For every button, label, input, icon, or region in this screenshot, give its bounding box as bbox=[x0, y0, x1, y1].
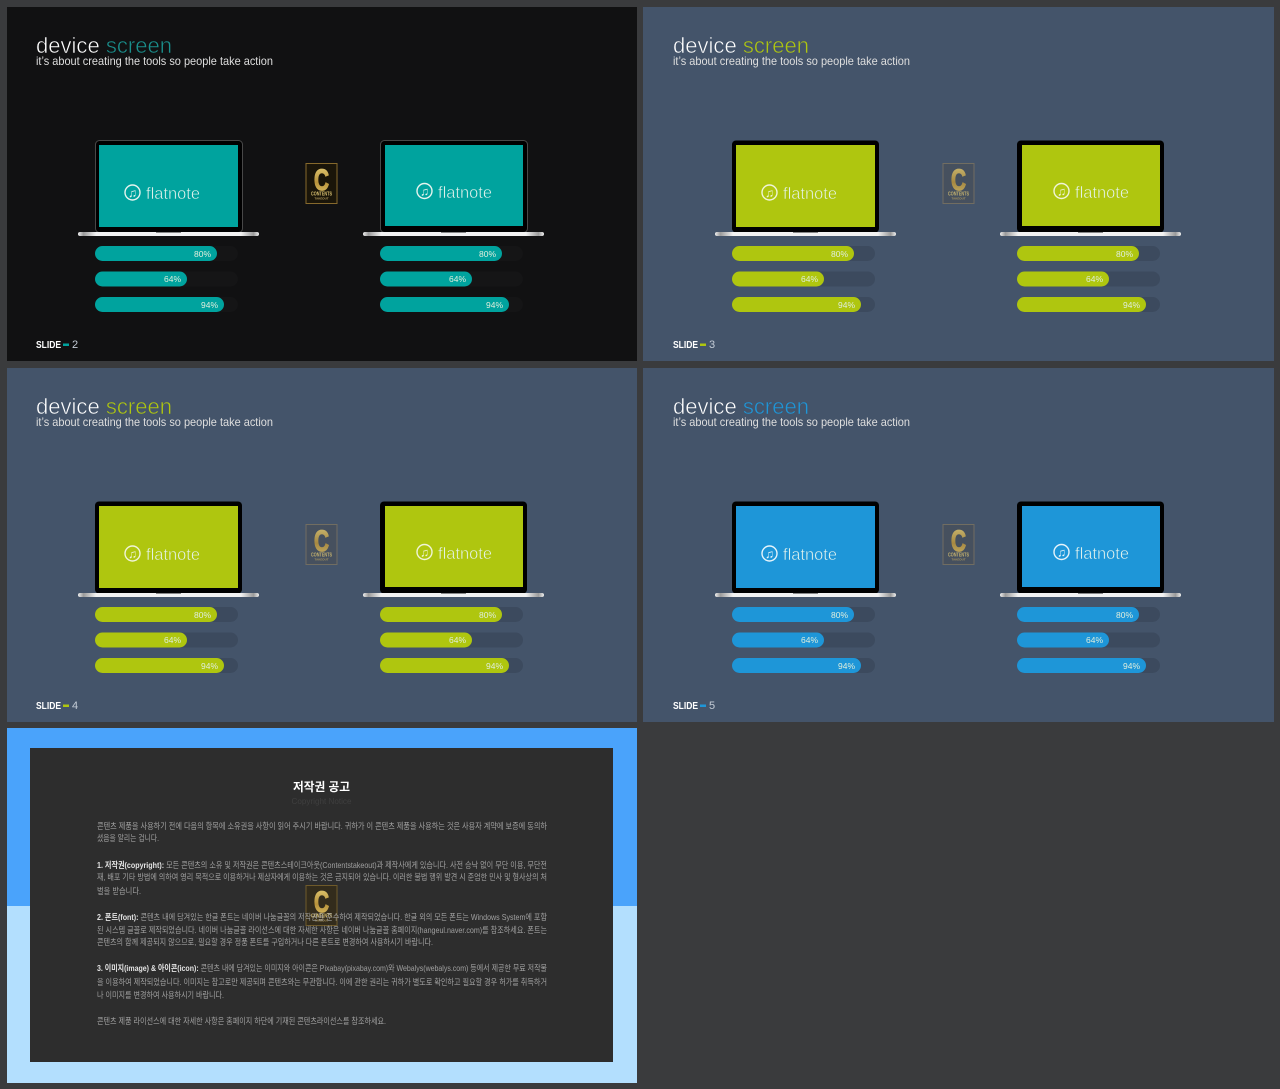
laptop left bbox=[78, 140, 259, 236]
bars left: 80% bbox=[194, 610, 211, 620]
notice footer: 콘텐츠 제품 라이선스에 대한 자세한 사항은 홈페이지 하단에 기재된 콘텐츠라이선스를 참조하세요. bbox=[97, 1016, 386, 1026]
bars left: 64% bbox=[801, 635, 818, 645]
panel: slide 2 (black, teal) bbox=[7, 7, 637, 361]
logo badge: CONTENTS bbox=[311, 914, 333, 920]
logo badge: C bbox=[951, 164, 966, 197]
notice section 2: 콘텐츠의 함께 제공되지 않으므로, 필요할 경우 정품 폰트를 구입하거나 다른 폰트로 변경하여 사용하시기 바랍니다. bbox=[97, 937, 433, 947]
laptop right bbox=[363, 502, 544, 597]
panel: slide 3 (slate, lime) bbox=[643, 7, 1274, 361]
bars left: 94% bbox=[838, 300, 855, 310]
laptop left: flatnote bbox=[146, 545, 200, 564]
logo badge: C bbox=[314, 525, 329, 558]
notice heading: 저작권 공고 bbox=[293, 779, 350, 794]
bars left: 80% bbox=[831, 249, 848, 259]
bars right: 64% bbox=[1086, 635, 1103, 645]
logo badge: CONTENTS bbox=[948, 192, 970, 198]
bars right: 94% bbox=[1123, 661, 1140, 671]
panel: slide 4 (slate, lime) bbox=[7, 368, 637, 722]
laptop right: flatnote bbox=[1075, 544, 1129, 563]
logo badge bbox=[306, 164, 337, 204]
laptop left: ♫ bbox=[128, 186, 137, 200]
laptop right: flatnote bbox=[438, 183, 492, 202]
slide number bbox=[673, 339, 715, 351]
slide number bbox=[36, 339, 78, 351]
laptop right: ♫ bbox=[420, 184, 429, 198]
slide number: SLIDE bbox=[36, 701, 61, 712]
bars right: 80% bbox=[479, 610, 496, 620]
notice section 3: 을 이용하여 제작되었습니다. 이미지는 참고로만 제공되며 콘텐츠와는 무관합니다. 이에 관한 권리는 귀하가 별도로 확인하고 필요할 경우 허가를 취득하거 bbox=[97, 977, 547, 987]
logo badge: C bbox=[314, 886, 329, 919]
title: device screen bbox=[36, 33, 172, 58]
logo badge bbox=[306, 524, 337, 564]
slide number: SLIDE bbox=[673, 340, 698, 351]
title: device screen bbox=[673, 394, 809, 419]
laptop right: ♫ bbox=[1057, 184, 1066, 198]
bars right: 64% bbox=[449, 635, 466, 645]
subtitle: it’s about creating the tools so people take action bbox=[36, 415, 273, 429]
notice intro: 셨음을 알리는 겁니다. bbox=[97, 833, 159, 843]
notice intro: 콘텐츠 제품을 사용하기 전에 다음의 항목에 소유권을 사항이 읽어 주시기 바랍니다. 귀하가 이 콘텐츠 제품을 사용하는 것은 사용자 계약에 보증에 동의하 bbox=[97, 821, 547, 831]
laptop left: flatnote bbox=[783, 545, 837, 564]
notice section 3 bbox=[97, 963, 547, 1000]
bars left bbox=[95, 246, 238, 312]
bars left: 80% bbox=[194, 249, 211, 259]
subtitle: it’s about creating the tools so people take action bbox=[673, 415, 910, 429]
subtitle: it’s about creating the tools so people take action bbox=[36, 54, 273, 68]
bars right: 94% bbox=[486, 300, 503, 310]
bars left: 64% bbox=[164, 635, 181, 645]
logo badge: TAKEOUT bbox=[952, 558, 966, 562]
laptop left: ♫ bbox=[765, 547, 774, 561]
logo badge: CONTENTS bbox=[311, 552, 333, 558]
panel: slide 5 (slate, blue) bbox=[643, 368, 1274, 722]
bars right: 80% bbox=[1116, 249, 1133, 259]
bars right bbox=[1017, 607, 1160, 673]
laptop right: flatnote bbox=[1075, 183, 1129, 202]
notice subheading: Copyright Notice bbox=[292, 797, 352, 806]
bars left: 94% bbox=[838, 661, 855, 671]
laptop left bbox=[715, 140, 896, 236]
logo badge: TAKEOUT bbox=[314, 918, 329, 922]
slide number bbox=[36, 700, 78, 712]
logo badge bbox=[306, 886, 337, 926]
notice section 3: 3. 이미지(image) & 아이콘(icon): 콘텐츠 내에 담겨있는 이미지와 아이콘은 Pixabay(pixabay.com)와 Webalys(webalys.com) 등에서 제공한 무료 저작물 bbox=[97, 963, 547, 973]
bars right: 64% bbox=[449, 274, 466, 284]
logo badge: C bbox=[951, 525, 966, 558]
notice section 3: 나 이미지를 변경하여 사용하시기 바랍니다. bbox=[97, 990, 224, 1000]
slide number: 2 bbox=[72, 339, 78, 351]
bars left bbox=[732, 246, 875, 312]
notice section 1: 1. 저작권(copyright): 모든 콘텐츠의 소유 및 저작권은 콘텐츠스테이크아웃(Contentstakeout)과 제작사에게 있습니다. 사전 승낙 없이 무단 이용, 무단전 bbox=[97, 860, 547, 870]
laptop right bbox=[363, 140, 544, 236]
notice section 1 bbox=[97, 860, 547, 896]
bars right: 80% bbox=[479, 249, 496, 259]
notice section 2: 된 시스템 글꼴로 제작되었습니다. 네이버 나눔글꼴 라이선스에 대한 자세한 사항은 네이버 나눔글꼴 홈페이지(hangeul.naver.com)를 참조하세요. 폰트는 bbox=[97, 925, 547, 935]
laptop right bbox=[1000, 502, 1181, 597]
panel: copyright notice bbox=[7, 728, 637, 1083]
laptop left bbox=[715, 502, 896, 597]
slide number: 5 bbox=[709, 700, 715, 712]
logo badge: TAKEOUT bbox=[314, 196, 329, 200]
slide number: SLIDE bbox=[36, 340, 61, 351]
bars right bbox=[380, 246, 523, 312]
notice section 1: 벌을 받습니다. bbox=[97, 886, 141, 896]
bars left: 64% bbox=[801, 274, 818, 284]
laptop left: ♫ bbox=[128, 547, 137, 561]
laptop left bbox=[78, 502, 259, 597]
slide number bbox=[673, 700, 715, 712]
notice section 2: 2. 폰트(font): 콘텐츠 내에 담겨있는 한글 폰트는 네이버 나눔글꼴의 저작권을 준수하여 제작되었습니다. 한글 외의 모든 폰트는 Windows System에 포함 bbox=[97, 912, 547, 922]
bars right: 94% bbox=[486, 661, 503, 671]
logo badge: TAKEOUT bbox=[952, 196, 966, 200]
bars left: 64% bbox=[164, 274, 181, 284]
logo badge bbox=[943, 524, 974, 564]
logo badge: CONTENTS bbox=[948, 552, 970, 558]
logo badge bbox=[943, 164, 974, 204]
notice section 2 bbox=[97, 912, 547, 947]
bars left: 80% bbox=[831, 610, 848, 620]
subtitle: it’s about creating the tools so people take action bbox=[673, 54, 910, 68]
laptop left: flatnote bbox=[783, 184, 837, 203]
notice intro bbox=[97, 821, 547, 843]
bars left bbox=[95, 607, 238, 673]
bars right bbox=[380, 607, 523, 673]
laptop left: flatnote bbox=[146, 184, 200, 203]
slide number: 3 bbox=[709, 339, 715, 351]
slide number: SLIDE bbox=[673, 701, 698, 712]
slide number: 4 bbox=[72, 700, 78, 712]
bars right bbox=[1017, 246, 1160, 312]
bars left: 94% bbox=[201, 300, 218, 310]
logo badge: C bbox=[314, 164, 329, 197]
laptop right: flatnote bbox=[438, 544, 492, 563]
logo badge: TAKEOUT bbox=[314, 558, 329, 562]
title: device screen bbox=[673, 33, 809, 58]
laptop right: ♫ bbox=[420, 546, 429, 560]
laptop right bbox=[1000, 140, 1181, 236]
bars right: 94% bbox=[1123, 300, 1140, 310]
laptop left: ♫ bbox=[765, 186, 774, 200]
bars left bbox=[732, 607, 875, 673]
title: device screen bbox=[36, 394, 172, 419]
logo badge: CONTENTS bbox=[311, 192, 333, 198]
laptop right: ♫ bbox=[1057, 546, 1066, 560]
bars right: 80% bbox=[1116, 610, 1133, 620]
bars right: 64% bbox=[1086, 274, 1103, 284]
bars left: 94% bbox=[201, 661, 218, 671]
notice section 1: 재, 배포 기타 방법에 의하여 영리 목적으로 이용하거나 제삼자에게 이용하는 것은 금지되어 있습니다. 이러한 불법 행위 발견 시 준엄한 민사 및 형사상의 처 bbox=[97, 872, 547, 882]
